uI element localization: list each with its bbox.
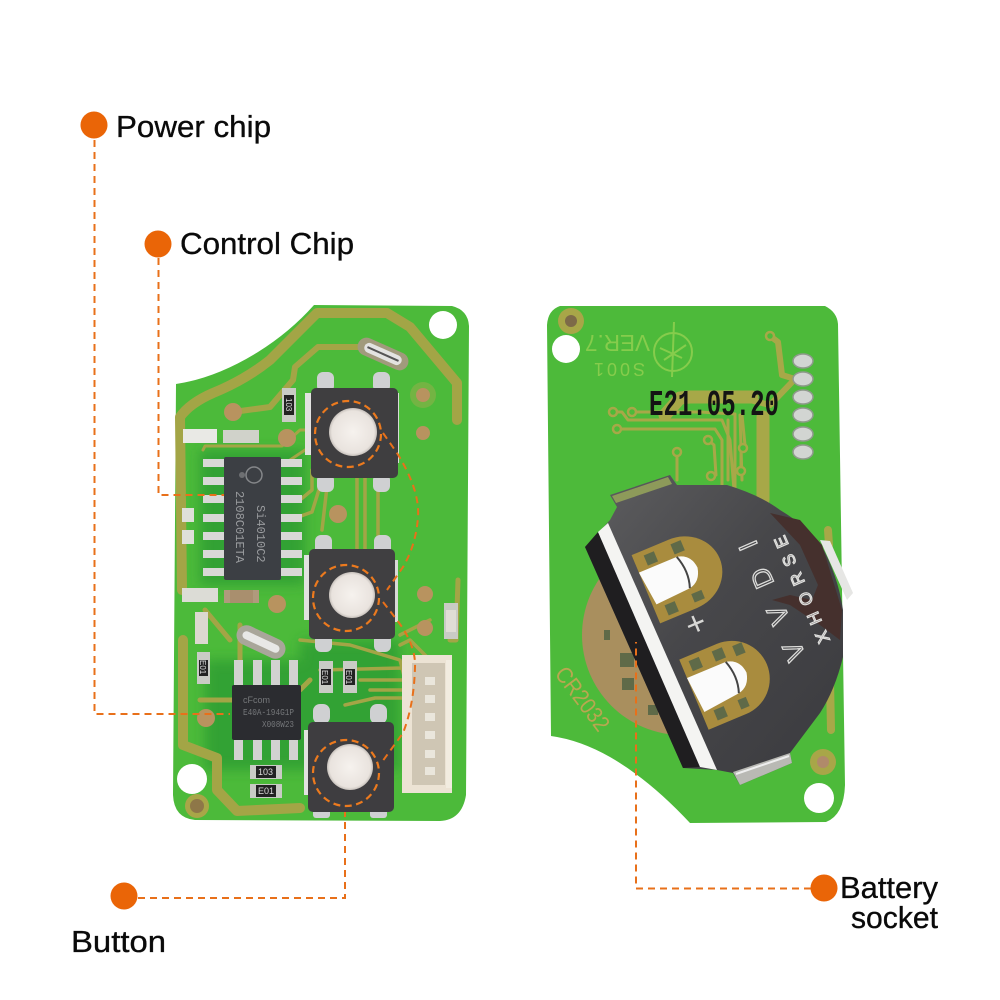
label: control chip: Control Chip xyxy=(180,226,354,261)
slot lower xyxy=(679,629,781,730)
panel: left circuit board (front) xyxy=(173,305,469,821)
power chip: E40A-194G1P xyxy=(243,708,294,718)
mounting hole top right xyxy=(429,311,457,339)
mounting hole bottom left xyxy=(177,764,209,818)
leader: battery socket xyxy=(636,642,811,888)
plus mark: + xyxy=(679,603,712,645)
resistors: E01 xyxy=(344,670,353,685)
crystal middle xyxy=(233,622,289,662)
resistors: E01 xyxy=(320,670,329,685)
power chip xyxy=(232,660,301,760)
crystal top xyxy=(355,335,411,373)
button middle xyxy=(304,535,398,652)
label: battery socket: socket xyxy=(851,900,938,935)
label: battery socket: Battery xyxy=(840,870,938,905)
battery contact disc xyxy=(582,535,782,735)
connector xyxy=(402,655,452,793)
mounting hole top left xyxy=(552,308,584,363)
control chip: 2108C01ETA xyxy=(232,491,246,564)
resistors: E01 xyxy=(198,660,207,675)
slot upper xyxy=(632,524,734,623)
copper traces xyxy=(180,313,458,811)
leader: power chip xyxy=(94,140,230,714)
date stamp: E21.05.20 xyxy=(649,385,779,426)
battery socket xyxy=(585,475,853,785)
label: battery socket xyxy=(810,870,938,935)
resistors: E01 xyxy=(258,786,274,796)
vias and pads xyxy=(197,403,433,727)
control chip: Si4010C2 xyxy=(253,505,267,563)
label: button: Button xyxy=(71,924,166,959)
control chip xyxy=(203,457,302,580)
copper traces xyxy=(613,336,831,730)
power chip: cFcom xyxy=(243,695,270,705)
label: power chip: Power chip xyxy=(116,109,271,144)
resistors xyxy=(182,388,458,798)
label: button xyxy=(71,882,166,959)
clamp strip xyxy=(585,532,700,768)
dashed links between buttons xyxy=(382,433,418,762)
resistors: 103 xyxy=(258,767,273,777)
button top xyxy=(305,372,399,492)
power chip: X008W23 xyxy=(262,720,294,730)
CR2032 silkscreen: CR2032 xyxy=(550,661,615,736)
leader: button xyxy=(138,812,345,898)
leader: control chip xyxy=(158,258,224,495)
VVDI engraving: VVDI xyxy=(733,536,812,666)
solder pads xyxy=(793,354,813,459)
Xhorse engraving: XHORSE xyxy=(771,533,834,646)
rust stain xyxy=(770,513,842,640)
logo and version silkscreen xyxy=(585,322,692,379)
mounting hole bottom right xyxy=(804,749,836,813)
resistors: 103 xyxy=(284,398,293,412)
panel: right circuit board (back) xyxy=(547,306,853,823)
logo and version silkscreen: VER.7 xyxy=(585,330,650,356)
logo and version silkscreen: S001 xyxy=(594,359,645,379)
button bottom xyxy=(304,704,394,818)
